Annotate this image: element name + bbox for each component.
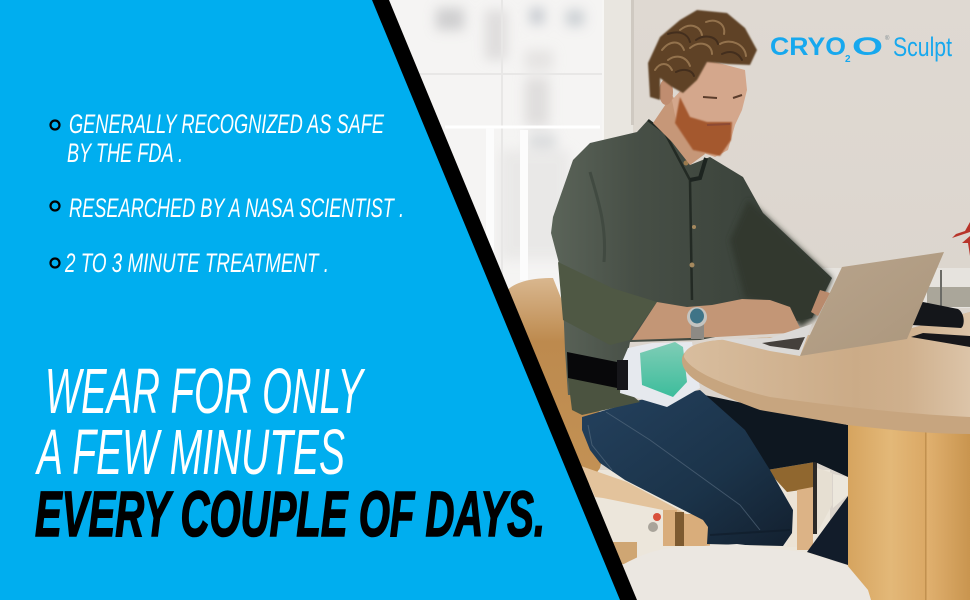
forearm and hand bbox=[632, 299, 800, 340]
fur throw on chair bbox=[505, 278, 605, 490]
beard bbox=[675, 97, 732, 156]
radiator panels behind legs bbox=[817, 468, 848, 533]
logo: Cryo2O Sculpt: CRYO bbox=[770, 33, 846, 61]
thigh under table shadow bbox=[690, 392, 848, 477]
headline: A FEW MINUTES bbox=[35, 416, 345, 488]
device housing bbox=[620, 342, 700, 407]
headphones bbox=[912, 302, 964, 328]
shirt placket and collar bbox=[590, 120, 706, 300]
laptop bbox=[720, 252, 944, 356]
stool bbox=[622, 544, 871, 600]
floor behind chair bbox=[590, 470, 830, 600]
bullet: NASA bbox=[50, 193, 404, 223]
hair bbox=[648, 10, 757, 100]
cabinet and shelf objects bbox=[613, 513, 661, 564]
ear bbox=[659, 79, 673, 105]
eyes and mouth bbox=[703, 95, 742, 125]
logo: Cryo2O Sculpt: 2 bbox=[845, 54, 851, 65]
device green gel pack bbox=[640, 342, 687, 397]
bullet: FDA: GENERALLY RECOGNIZED AS SAFE bbox=[69, 109, 385, 139]
shirt hem below belt bbox=[568, 378, 640, 415]
jeans seams bbox=[588, 412, 790, 535]
wall background bbox=[380, 0, 970, 600]
logo: Cryo2O Sculpt bbox=[770, 32, 952, 65]
blue panel bbox=[0, 0, 620, 600]
far leg bbox=[807, 496, 848, 565]
headline: WEAR FOR ONLY bbox=[45, 355, 366, 427]
device buckle bbox=[617, 360, 628, 390]
table top surface bbox=[684, 312, 970, 417]
window frame bbox=[602, 0, 633, 300]
bullet: NASA: RESEARCHED BY A NASA SCIENTIST . bbox=[69, 193, 404, 223]
logo: Cryo2O Sculpt: O bbox=[852, 33, 883, 61]
bullet: FDA bbox=[50, 109, 385, 168]
waist belt bbox=[567, 352, 617, 388]
jeans bbox=[582, 390, 793, 546]
bullet: treatment time: 2 TO 3 MINUTE TREATMENT . bbox=[64, 248, 329, 278]
right sleeve shade bbox=[730, 200, 832, 328]
bullet: treatment time bbox=[50, 248, 329, 278]
bullet: FDA: BY THE FDA . bbox=[67, 138, 183, 168]
bullet list bbox=[50, 109, 404, 278]
headline bbox=[35, 355, 545, 550]
rolled sleeve bbox=[558, 262, 657, 345]
window with blurred outdoor view bbox=[380, 0, 602, 300]
logo: Cryo2O Sculpt: Sculpt bbox=[893, 32, 952, 62]
chair frame bbox=[581, 462, 817, 550]
watch bbox=[687, 307, 707, 339]
logo: Cryo2O Sculpt: ® bbox=[885, 35, 890, 42]
neck bbox=[653, 95, 705, 165]
headline: EVERY COUPLE OF DAYS. bbox=[35, 478, 545, 550]
phone bbox=[911, 333, 970, 347]
table top edge bbox=[682, 312, 970, 434]
black diagonal stripe bbox=[370, 0, 637, 600]
table leg bbox=[848, 425, 970, 600]
red plant bbox=[952, 222, 970, 256]
photo: man at laptop wearing device bbox=[380, 0, 970, 600]
arm skin at right bbox=[811, 290, 830, 316]
shirt bbox=[551, 120, 832, 395]
face bbox=[672, 60, 747, 157]
radiator under window bbox=[810, 268, 970, 308]
